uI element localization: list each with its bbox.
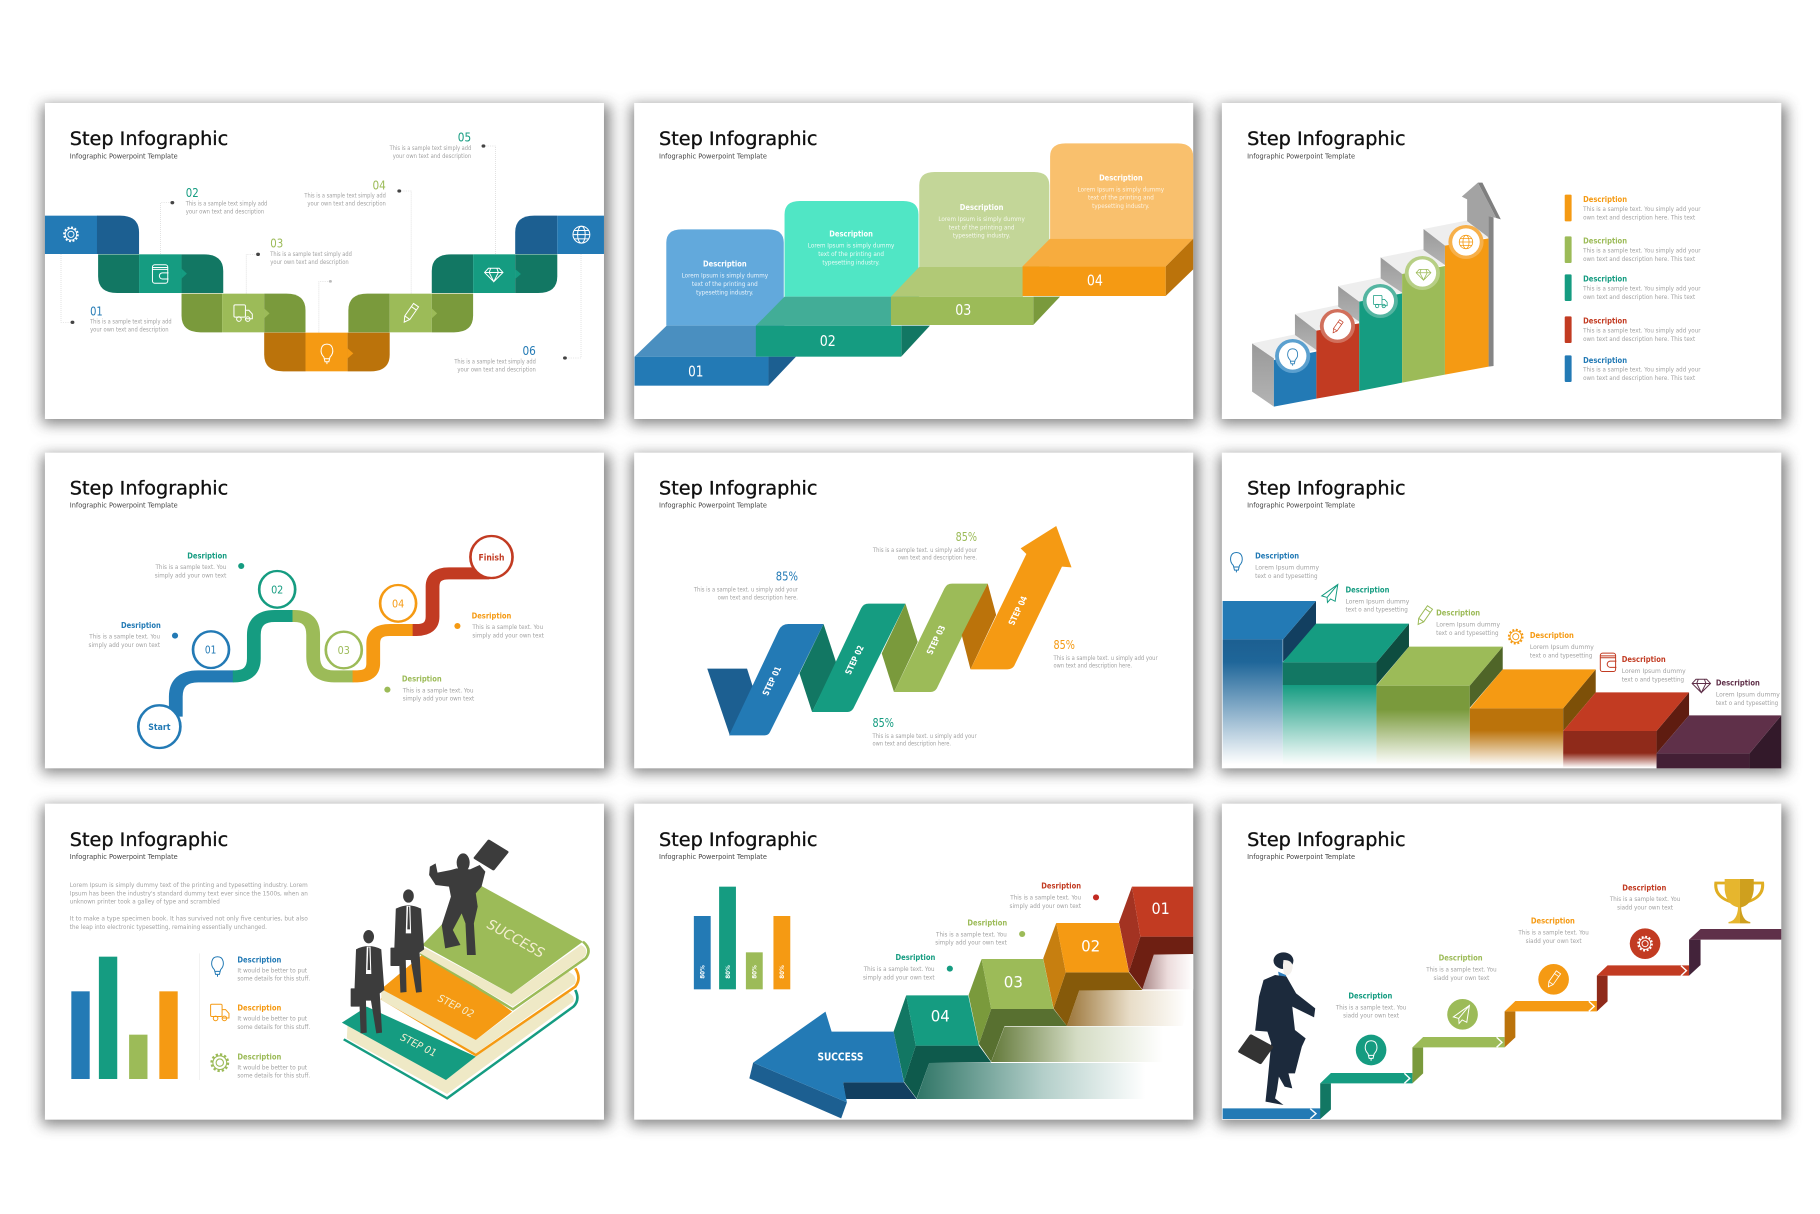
panel: 3D cards bbox=[634, 103, 1193, 419]
ribbon labels bbox=[760, 594, 1030, 697]
text: step 06: your own text and description bbox=[457, 366, 536, 373]
book: step 02: STEP 02 bbox=[435, 992, 477, 1020]
paragraph: the leap into electronic typesetting, remaining essentially unchanged. bbox=[70, 923, 267, 931]
text: step 03 bbox=[270, 237, 352, 266]
item: green: some details for this stuff. bbox=[237, 1072, 310, 1080]
stat: orange: This is a sample text. u simply add your bbox=[1053, 654, 1158, 662]
stat: green: 85% bbox=[956, 531, 977, 545]
legend: green: own text and description here. This text bbox=[1583, 255, 1695, 263]
note: green bbox=[384, 675, 475, 703]
note: red bbox=[1609, 884, 1680, 912]
stat: blue bbox=[693, 570, 798, 601]
text: step 06 bbox=[454, 345, 536, 373]
legend: teal: own text and description here. This text bbox=[1583, 293, 1695, 301]
note: green: This is a sample text. You bbox=[935, 931, 1007, 938]
title: Step Infographic bbox=[1247, 127, 1406, 150]
leader dots bbox=[71, 144, 567, 360]
note: teal: siadd your own text bbox=[1343, 1012, 1399, 1020]
panel: success arrow staircase bbox=[634, 804, 1193, 1120]
note: red: This is a sample text. You bbox=[1609, 895, 1680, 903]
note: green: siadd your own text bbox=[1433, 974, 1490, 982]
icon: plane bbox=[1322, 584, 1338, 602]
arrow: success bbox=[749, 1012, 917, 1118]
legend: blue: This is a sample text. You simply add your bbox=[1582, 366, 1701, 374]
note: teal: This is a sample text. You bbox=[1335, 1004, 1406, 1011]
note: green: Desription bbox=[967, 919, 1007, 928]
note: teal: Description bbox=[1348, 992, 1392, 1001]
text: step 02 bbox=[185, 187, 267, 216]
step 02: 02 bbox=[1081, 938, 1100, 956]
bar chart bbox=[694, 887, 790, 989]
panel: zigzag ribbon arrow bbox=[634, 453, 1193, 768]
book: step 01: STEP 01 bbox=[397, 1031, 439, 1059]
node: 04 bbox=[380, 585, 416, 622]
note: red: This is a sample text. You bbox=[1009, 894, 1081, 902]
step 03 block: Lorem Ipsum is simply dummy bbox=[938, 215, 1025, 223]
node: 03 bbox=[326, 632, 362, 668]
badge: bulb bbox=[1356, 1035, 1386, 1065]
note: teal bbox=[155, 552, 244, 579]
panel: books and businessmen bbox=[45, 804, 604, 1120]
note: teal bbox=[1335, 992, 1406, 1020]
step 01: 01 bbox=[1152, 900, 1170, 919]
text: red description: Lorem Ipsum dummy bbox=[1622, 667, 1686, 675]
step 04 block: Description bbox=[1099, 174, 1143, 183]
step 01 block bbox=[635, 229, 796, 386]
note: teal: simply add your own text bbox=[863, 974, 935, 981]
bar chart: 80% bbox=[751, 965, 759, 979]
item: green: Description bbox=[237, 1053, 281, 1062]
text: red description bbox=[1622, 655, 1686, 683]
text: step 05: 05 bbox=[458, 131, 471, 145]
text: step 04 bbox=[304, 179, 386, 208]
legend: orange: This is a sample text. You simply add your bbox=[1582, 205, 1701, 213]
text: teal description: text o and typesetting bbox=[1345, 606, 1408, 614]
note: green: Desription bbox=[402, 675, 442, 684]
subtitle: Infographic Powerpoint Template bbox=[659, 501, 767, 510]
step 02 bbox=[1043, 923, 1142, 1026]
note: red: Description bbox=[1622, 884, 1666, 893]
note: teal bbox=[863, 953, 953, 981]
text: teal description: Lorem Ipsum dummy bbox=[1345, 598, 1409, 605]
step 04 block: typesetting industry. bbox=[1092, 202, 1150, 210]
bar chart: 80% bbox=[724, 965, 732, 979]
title: Step Infographic bbox=[659, 127, 817, 150]
legend: teal bbox=[1565, 274, 1701, 301]
book: success bbox=[420, 885, 588, 1009]
step 04 block: 04 bbox=[1087, 272, 1103, 289]
legend: red: own text and description here. This text bbox=[1583, 335, 1695, 343]
step 03 block: 03 bbox=[955, 301, 971, 319]
ribbon labels: STEP 01 bbox=[760, 665, 784, 697]
step 04 block: Lorem Ipsum is simply dummy bbox=[1078, 186, 1164, 193]
legend: orange: Description bbox=[1583, 195, 1627, 205]
badge: bulb bbox=[1275, 339, 1310, 373]
legend: green: This is a sample text. You simply add your bbox=[1582, 247, 1701, 255]
arrow: success: SUCCESS bbox=[817, 1050, 863, 1063]
text: orange description: Description bbox=[1530, 631, 1574, 641]
text: step 04: 04 bbox=[372, 179, 386, 193]
block: orange bbox=[1470, 669, 1596, 766]
text: teal description: Description bbox=[1345, 586, 1389, 595]
text: step 03: 03 bbox=[270, 237, 283, 251]
text: step 02: your own text and description bbox=[186, 208, 264, 216]
note: orange: siadd your own text bbox=[1526, 937, 1582, 945]
note: blue: This is a sample text. You bbox=[88, 633, 160, 641]
title: Step Infographic bbox=[70, 127, 228, 150]
title: Step Infographic bbox=[659, 828, 817, 851]
badge: truck bbox=[1363, 284, 1398, 318]
note: orange: Desription bbox=[472, 612, 511, 621]
legend: blue bbox=[1565, 355, 1701, 382]
note: green: simply add your own text bbox=[403, 695, 475, 703]
title: Step Infographic bbox=[70, 477, 228, 499]
subtitle: Infographic Powerpoint Template bbox=[1247, 852, 1356, 861]
note: blue bbox=[88, 621, 178, 649]
arrow bbox=[1462, 183, 1501, 367]
text: red description: Description bbox=[1622, 655, 1666, 665]
legend: teal: Description bbox=[1583, 275, 1627, 284]
winding path bbox=[176, 573, 489, 717]
step 04 bbox=[894, 995, 991, 1098]
note: green bbox=[1425, 954, 1497, 982]
legend: red: Description bbox=[1583, 317, 1627, 326]
item: blue: It would be better to put bbox=[237, 967, 307, 974]
text: purple description bbox=[1716, 679, 1780, 707]
item: orange: Description bbox=[237, 1004, 281, 1013]
stat: teal: own text and description here. bbox=[873, 740, 951, 748]
legend: red bbox=[1565, 316, 1701, 343]
bar chart: 80% bbox=[699, 965, 707, 979]
badge: gear bbox=[1630, 928, 1660, 959]
icon: gear bbox=[212, 1054, 228, 1071]
step 03 block: Description bbox=[960, 203, 1003, 213]
text: step 01: 01 bbox=[90, 305, 103, 319]
panel: winding path bbox=[45, 453, 604, 768]
item: green: It would be better to put bbox=[237, 1064, 307, 1071]
text: purple description: Description bbox=[1716, 679, 1760, 688]
text: step 06: 06 bbox=[522, 345, 536, 359]
item: orange bbox=[237, 1004, 310, 1031]
text: step 04: your own text and description bbox=[307, 200, 386, 208]
legend: blue: Description bbox=[1583, 356, 1627, 366]
panel: climbing businessman bbox=[1222, 804, 1781, 1120]
ribbon labels: STEP 02 bbox=[843, 644, 866, 676]
text: step 06: This is a sample text simply add bbox=[454, 358, 536, 365]
legend: green: Description bbox=[1583, 237, 1627, 246]
step 01 block: Lorem Ipsum is simply dummy bbox=[682, 272, 768, 280]
note: red: Desription bbox=[1041, 882, 1081, 891]
icon: gear bbox=[64, 227, 78, 241]
step 03 block: typesetting industry. bbox=[953, 232, 1010, 240]
block: purple bbox=[1657, 715, 1781, 768]
silhouette: middle man bbox=[390, 889, 424, 993]
icon: bulb bbox=[321, 344, 333, 364]
text: step 03: your own text and description bbox=[270, 258, 349, 266]
block: red bbox=[1563, 692, 1689, 768]
subtitle: Infographic Powerpoint Template bbox=[1247, 152, 1356, 160]
node: 03: 03 bbox=[338, 644, 350, 657]
block: green bbox=[1376, 647, 1503, 765]
note: orange bbox=[454, 612, 544, 639]
icon: diamond bbox=[1692, 679, 1711, 693]
ribbon labels: STEP 03 bbox=[924, 624, 948, 656]
stat: orange bbox=[1053, 639, 1158, 670]
text: blue description: Lorem Ipsum dummy bbox=[1255, 564, 1319, 572]
icon: gear bbox=[1509, 630, 1523, 644]
note: blue: simply add your own text bbox=[89, 641, 160, 649]
node: 02 bbox=[259, 571, 295, 608]
step 03 block: text of the printing and bbox=[949, 224, 1015, 231]
badge: pencil bbox=[1538, 964, 1569, 995]
note: red bbox=[1009, 882, 1099, 910]
businessman bbox=[1238, 952, 1315, 1105]
badge: plane bbox=[1447, 999, 1478, 1030]
step ribbon bbox=[45, 216, 604, 371]
text: blue description: Description bbox=[1255, 552, 1299, 561]
text: orange description: Lorem Ipsum dummy bbox=[1530, 643, 1594, 651]
text: blue description bbox=[1255, 552, 1319, 580]
text: blue description: text o and typesetting bbox=[1255, 572, 1318, 580]
icon: pencil bbox=[402, 303, 419, 324]
item: blue: Description bbox=[237, 956, 281, 965]
icon: globe bbox=[573, 226, 590, 243]
note: orange: Description bbox=[1531, 917, 1575, 926]
stat: teal bbox=[872, 717, 977, 748]
panel: descending blocks bbox=[1222, 453, 1781, 768]
subtitle: Infographic Powerpoint Template bbox=[70, 852, 178, 861]
text: purple description: text o and typesetting bbox=[1716, 699, 1778, 707]
step 02 block: typesetting industry. bbox=[822, 259, 880, 266]
legend: orange bbox=[1565, 195, 1701, 221]
legend: teal: This is a sample text. You simply add your bbox=[1582, 285, 1701, 293]
block: teal bbox=[1283, 624, 1409, 765]
note: blue: Desription bbox=[121, 621, 161, 631]
step 02 block bbox=[756, 201, 930, 357]
stat: green: This is a sample text. u simply add your bbox=[872, 546, 977, 554]
text: step 02: 02 bbox=[186, 187, 199, 201]
item: orange: It would be better to put bbox=[237, 1015, 307, 1023]
step 01 block: text of the printing and bbox=[692, 280, 758, 288]
stat: orange: own text and description here. bbox=[1054, 662, 1132, 670]
step 01 block: typesetting industry. bbox=[696, 289, 754, 296]
text: purple description: Lorem Ipsum dummy bbox=[1716, 691, 1780, 699]
paragraph: Ipsum has been the industry's standard dummy text ever since the 1500s, when an bbox=[70, 890, 308, 897]
book: step 02 bbox=[381, 950, 579, 1055]
block: blue bbox=[1223, 601, 1316, 764]
trophy bbox=[1716, 879, 1763, 923]
node: finish: Finish bbox=[478, 553, 505, 563]
step 02 block: Lorem Ipsum is simply dummy bbox=[808, 242, 894, 250]
item: blue bbox=[237, 956, 310, 983]
icon: wallet bbox=[152, 265, 169, 283]
icon: truck bbox=[234, 305, 252, 321]
note: green: simply add your own text bbox=[935, 939, 1007, 947]
paragraph: Lorem Ipsum is simply dummy text of the printing and typesetting industry. Lorem bbox=[70, 881, 308, 889]
step 03 bbox=[969, 959, 1067, 1062]
note: orange bbox=[1518, 917, 1589, 945]
silhouette: standing man bbox=[351, 930, 384, 1033]
stat: blue: own text and description here. bbox=[718, 594, 798, 601]
text: red description: text o and typesetting bbox=[1622, 676, 1684, 683]
step 03 block bbox=[891, 172, 1060, 325]
text: step 05: your own text and description bbox=[393, 152, 471, 160]
step 01 block: 01 bbox=[688, 363, 703, 380]
badge: wallet bbox=[1448, 225, 1484, 259]
stair tops and sides bbox=[1252, 221, 1489, 407]
book: success: SUCCESS bbox=[483, 917, 547, 961]
ribbon staircase bbox=[1223, 929, 1781, 1119]
paragraph: unknown printer took a galley of type and scrambled bbox=[70, 898, 220, 906]
note: orange: simply add your own text bbox=[472, 632, 544, 639]
stat: green: own text and description here. bbox=[898, 554, 977, 562]
text: step 01 bbox=[89, 305, 172, 334]
text: orange description: text o and typesetting bbox=[1530, 652, 1592, 659]
text: green description: Description bbox=[1436, 609, 1480, 618]
note: green: This is a sample text. You bbox=[402, 687, 473, 694]
node: 01 bbox=[193, 631, 229, 668]
bar chart bbox=[71, 957, 178, 1079]
node: 04: 04 bbox=[392, 597, 404, 610]
bar chart: 80% bbox=[779, 965, 786, 979]
legend: blue: own text and description here. This text bbox=[1583, 374, 1695, 382]
subtitle: Infographic Powerpoint Template bbox=[659, 152, 767, 160]
text: teal description bbox=[1345, 586, 1409, 614]
title: Step Infographic bbox=[1247, 477, 1406, 499]
note: red: siadd your own text bbox=[1617, 904, 1673, 912]
title: Step Infographic bbox=[659, 477, 817, 499]
book: step 01 bbox=[342, 990, 577, 1098]
paragraph bbox=[70, 881, 308, 931]
badge: pencil bbox=[1320, 309, 1355, 343]
stat: teal: This is a sample text. u simply add your bbox=[872, 732, 977, 740]
step 04: 04 bbox=[931, 1008, 950, 1026]
text: green description: Lorem Ipsum dummy bbox=[1436, 621, 1500, 629]
note: teal: Desription bbox=[896, 953, 935, 963]
text: step 05: This is a sample text simply add bbox=[389, 144, 471, 152]
step 02 block: text of the printing and bbox=[818, 250, 884, 258]
silhouette: jumping man bbox=[429, 839, 509, 955]
legend: red: This is a sample text. You simply add your bbox=[1582, 327, 1701, 335]
ribbon labels: STEP 04 bbox=[1006, 594, 1030, 627]
item: blue: some details for this stuff. bbox=[237, 975, 310, 983]
zigzag ribbon bbox=[707, 526, 1072, 735]
subtitle: Infographic Powerpoint Template bbox=[659, 852, 767, 861]
panel: curved steps bbox=[45, 103, 604, 419]
text: step 02: This is a sample text simply add bbox=[185, 200, 267, 208]
icon: truck bbox=[211, 1004, 229, 1021]
note: teal: This is a sample text. You bbox=[155, 563, 226, 571]
text: step 01: This is a sample text simply add bbox=[89, 318, 172, 326]
badge: diamond bbox=[1405, 256, 1440, 290]
fading bands bbox=[917, 955, 1193, 1099]
item: green bbox=[237, 1053, 310, 1080]
text: step 03: This is a sample text simply add bbox=[270, 250, 352, 258]
node: start: Start bbox=[148, 723, 171, 733]
step 01 block: Description bbox=[703, 260, 747, 269]
icon: bulb bbox=[212, 957, 223, 977]
text: step 04: This is a sample text simply add bbox=[304, 192, 386, 200]
subtitle: Infographic Powerpoint Template bbox=[70, 501, 178, 510]
node: 01: 01 bbox=[205, 643, 216, 656]
icon: bulb bbox=[1231, 552, 1242, 572]
note: teal: This is a sample text. You bbox=[863, 965, 935, 973]
panel: isometric stairs with arrow bbox=[1222, 103, 1781, 419]
subtitle: Infographic Powerpoint Template bbox=[70, 152, 178, 160]
icon: diamond bbox=[485, 268, 503, 282]
note: teal: Desription bbox=[187, 552, 227, 561]
item: orange: some details for this stuff. bbox=[237, 1023, 310, 1031]
text: green description: text o and typesetting bbox=[1436, 629, 1499, 637]
note: red: simply add your own text bbox=[1010, 902, 1081, 910]
step 04 block bbox=[1023, 143, 1193, 296]
text: green description bbox=[1436, 609, 1500, 637]
node: start bbox=[138, 705, 180, 748]
icon: pencil bbox=[1416, 606, 1432, 626]
note: orange: This is a sample text. You bbox=[1518, 929, 1589, 936]
note: teal: simply add your own text bbox=[155, 572, 227, 579]
text: step 01: your own text and description bbox=[90, 326, 169, 334]
stat: green bbox=[872, 531, 977, 562]
node: 02: 02 bbox=[271, 583, 283, 596]
note: orange: This is a sample text. You bbox=[472, 623, 543, 631]
note: green: This is a sample text. You bbox=[1425, 966, 1497, 974]
step 02 block: 02 bbox=[820, 332, 836, 350]
text: orange description bbox=[1530, 631, 1594, 659]
step 03: 03 bbox=[1004, 973, 1023, 992]
step 02 block: Description bbox=[829, 230, 873, 239]
step 04 block: text of the printing and bbox=[1088, 194, 1154, 202]
note: green bbox=[935, 919, 1025, 947]
text: step 05 bbox=[389, 131, 471, 160]
colored columns bbox=[1274, 238, 1489, 407]
leader lines bbox=[61, 146, 581, 358]
step 01 bbox=[1119, 887, 1193, 989]
stat: orange: 85% bbox=[1054, 639, 1075, 653]
paragraph: It to make a type specimen book. It has survived not only five centuries, but also bbox=[70, 915, 308, 923]
legend: green bbox=[1565, 236, 1701, 263]
legend: orange: own text and description here. This text bbox=[1583, 214, 1695, 221]
subtitle: Infographic Powerpoint Template bbox=[1247, 501, 1356, 510]
stat: blue: 85% bbox=[776, 570, 798, 584]
icon: wallet bbox=[1600, 653, 1616, 672]
stat: teal: 85% bbox=[873, 717, 894, 731]
title: Step Infographic bbox=[70, 828, 228, 851]
note: green: Description bbox=[1439, 954, 1483, 963]
stat: blue: This is a sample text. u simply add your bbox=[693, 586, 798, 594]
title: Step Infographic bbox=[1247, 828, 1406, 851]
node: finish bbox=[470, 536, 513, 578]
